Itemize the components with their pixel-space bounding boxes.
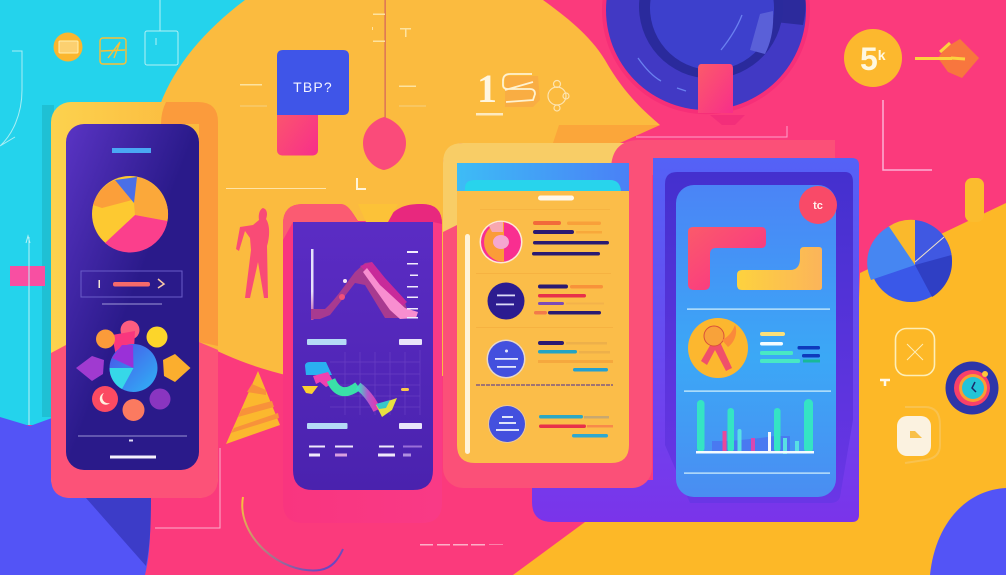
header bar: [112, 148, 151, 153]
T mark: [880, 380, 890, 386]
pie chart right: [867, 220, 952, 302]
curved gradient arc: [242, 497, 343, 570]
icon: X box: [896, 328, 934, 376]
label bars lower: [307, 423, 422, 429]
divider: [684, 472, 830, 474]
phone 2 notch: [358, 204, 398, 222]
background: bottom yellow: [513, 203, 1006, 575]
phone 3 card: [457, 163, 629, 463]
row 3: [486, 340, 613, 378]
card label: TBP?: [293, 79, 333, 95]
lens dark top right: [770, 0, 806, 25]
badge number: k: [878, 47, 886, 63]
number 19: 1: [477, 66, 497, 111]
purple lens: big circle: [602, 0, 810, 114]
dashed divider: [476, 384, 613, 386]
L mark: [357, 178, 366, 189]
connector elbow: [883, 100, 932, 170]
bottom dashes: [420, 544, 503, 546]
curved outline: [0, 51, 22, 146]
lens body: [606, 0, 806, 110]
teal side shadow: [42, 105, 54, 417]
thin divider line: [226, 188, 326, 189]
divider: [102, 304, 162, 305]
chart ticks: [407, 251, 418, 318]
line chart: [311, 249, 418, 320]
phone 2 right hump: [385, 204, 442, 224]
lens inner ring: [639, 0, 783, 79]
phone 1 frame: [51, 102, 218, 498]
grid chart: [302, 350, 420, 417]
side scroll bar: [465, 234, 470, 454]
lens highlight: [638, 15, 742, 91]
phone 1 orange right edge: [161, 102, 218, 346]
gold pill: [965, 178, 984, 222]
phone 2 left hump: [283, 204, 358, 240]
category wheel: [76, 320, 190, 421]
thin line with arrow: [26, 236, 30, 425]
card blue top: [277, 50, 349, 115]
right phone: [665, 172, 853, 503]
arrow icon: [915, 39, 979, 78]
phone 2: [283, 204, 442, 523]
medal bars: [760, 332, 820, 363]
card pink tail: [277, 100, 318, 156]
right phone inner shadow: [665, 172, 853, 503]
phone 3 header: [457, 163, 629, 191]
right phone blue card: [676, 185, 836, 497]
icon: yellow square: [100, 38, 126, 64]
yellow block: [737, 247, 822, 290]
icon: outlined square on string: [145, 0, 178, 65]
footer bar: [110, 456, 156, 458]
rainbow wave: [302, 362, 409, 417]
violet back panel: [532, 158, 859, 522]
footer divider: [78, 436, 187, 437]
background: yellow blob: [160, 0, 660, 376]
background: dark blue wedge: [86, 498, 151, 566]
legend dashes: [309, 446, 422, 456]
phone 1: [51, 102, 218, 498]
lens halo: [602, 0, 810, 114]
small yellow dashes: [240, 14, 426, 106]
card: TBP: [277, 50, 349, 156]
divider: [684, 390, 831, 392]
pink tab: [10, 266, 45, 286]
row 4: [488, 405, 613, 443]
number 19: [476, 66, 540, 116]
phone 3 pale top edge: [443, 143, 640, 232]
phone 3 header inner: [465, 180, 621, 191]
badge number: 5: [860, 41, 878, 77]
connector guide line: [636, 126, 787, 137]
red badge: [799, 186, 837, 224]
footer dot: [129, 440, 133, 442]
background: cyan panel: [0, 0, 300, 425]
phone 2 frame: [283, 204, 442, 523]
colourful dial: [946, 362, 998, 414]
row 1: [480, 220, 609, 264]
app icon: [897, 407, 940, 463]
background: blue circle bottom right: [930, 488, 1006, 575]
pill: [538, 196, 574, 200]
hanging pendant: [363, 0, 406, 170]
red badge: tc: [813, 200, 823, 212]
corner guide line: [155, 448, 220, 528]
phone 1 screen: [66, 124, 199, 470]
row 2: [488, 282, 604, 320]
phone 1 pink lower frame: [51, 342, 218, 498]
phone 3 frame: [443, 143, 652, 488]
medal: [688, 318, 748, 378]
phone 2 screen: [293, 222, 433, 490]
phone 3: [443, 125, 835, 488]
label bars: [307, 339, 422, 345]
phone 3 pink bulge: [611, 140, 835, 175]
icon: puzzle: [548, 80, 569, 111]
lens glass: [650, 0, 774, 70]
connector base shadow: [710, 115, 745, 125]
row dividers: [476, 209, 613, 328]
divider: [687, 308, 830, 310]
background: blue corner: [0, 417, 160, 575]
badge number: [844, 29, 902, 87]
red L block: [688, 227, 766, 290]
icon: orange badge: [54, 32, 82, 62]
striped triangle: [226, 371, 280, 444]
phone 3 orange fold: [553, 125, 660, 143]
figure silhouette: [236, 208, 269, 298]
bar chart: [696, 399, 814, 454]
pie chart: [92, 176, 168, 252]
lens connector: [698, 64, 733, 113]
progress box: [81, 271, 182, 297]
